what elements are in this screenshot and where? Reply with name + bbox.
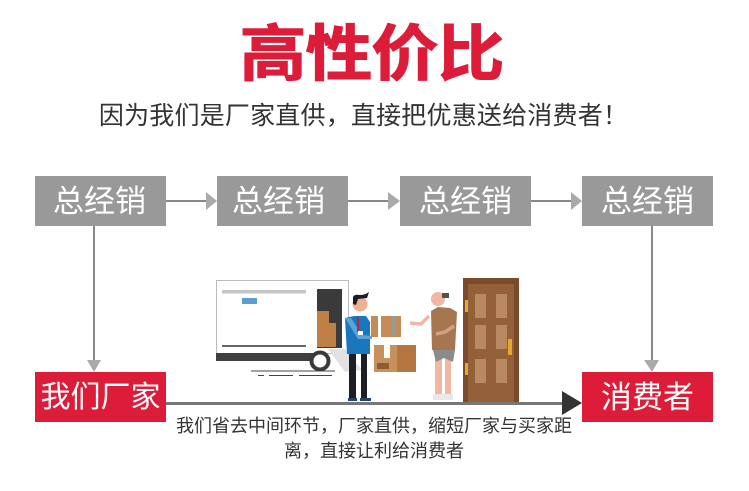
- box: our factory: [35, 372, 166, 422]
- box: distributor 1: [35, 176, 166, 226]
- title: 高性价比: [240, 20, 504, 89]
- boxes: [371, 316, 416, 372]
- box: distributor 2: [217, 176, 348, 226]
- box: distributor 2: 总经销: [232, 184, 325, 219]
- caption: 离，直接让利给消费者: [284, 441, 464, 461]
- box: our factory: 我们厂家: [40, 381, 160, 414]
- box: distributor 3: [400, 176, 531, 226]
- box: distributor 4: [582, 176, 713, 226]
- box: consumer: 消费者: [601, 380, 694, 415]
- box: consumer: [582, 372, 713, 422]
- caption: 我们省去中间环节，厂家直供，缩短厂家与买家距: [176, 416, 572, 436]
- door: [463, 278, 519, 402]
- box: distributor 1: 总经销: [53, 184, 146, 219]
- box: distributor 3: 总经销: [419, 184, 512, 219]
- delivery man: [345, 292, 372, 401]
- box: distributor 4: 总经销: [601, 184, 694, 219]
- subtitle: 因为我们是厂家直供，直接把优惠送给消费者！: [99, 102, 628, 130]
- caption: [176, 416, 572, 461]
- truck: [216, 280, 362, 376]
- customer: [410, 292, 457, 400]
